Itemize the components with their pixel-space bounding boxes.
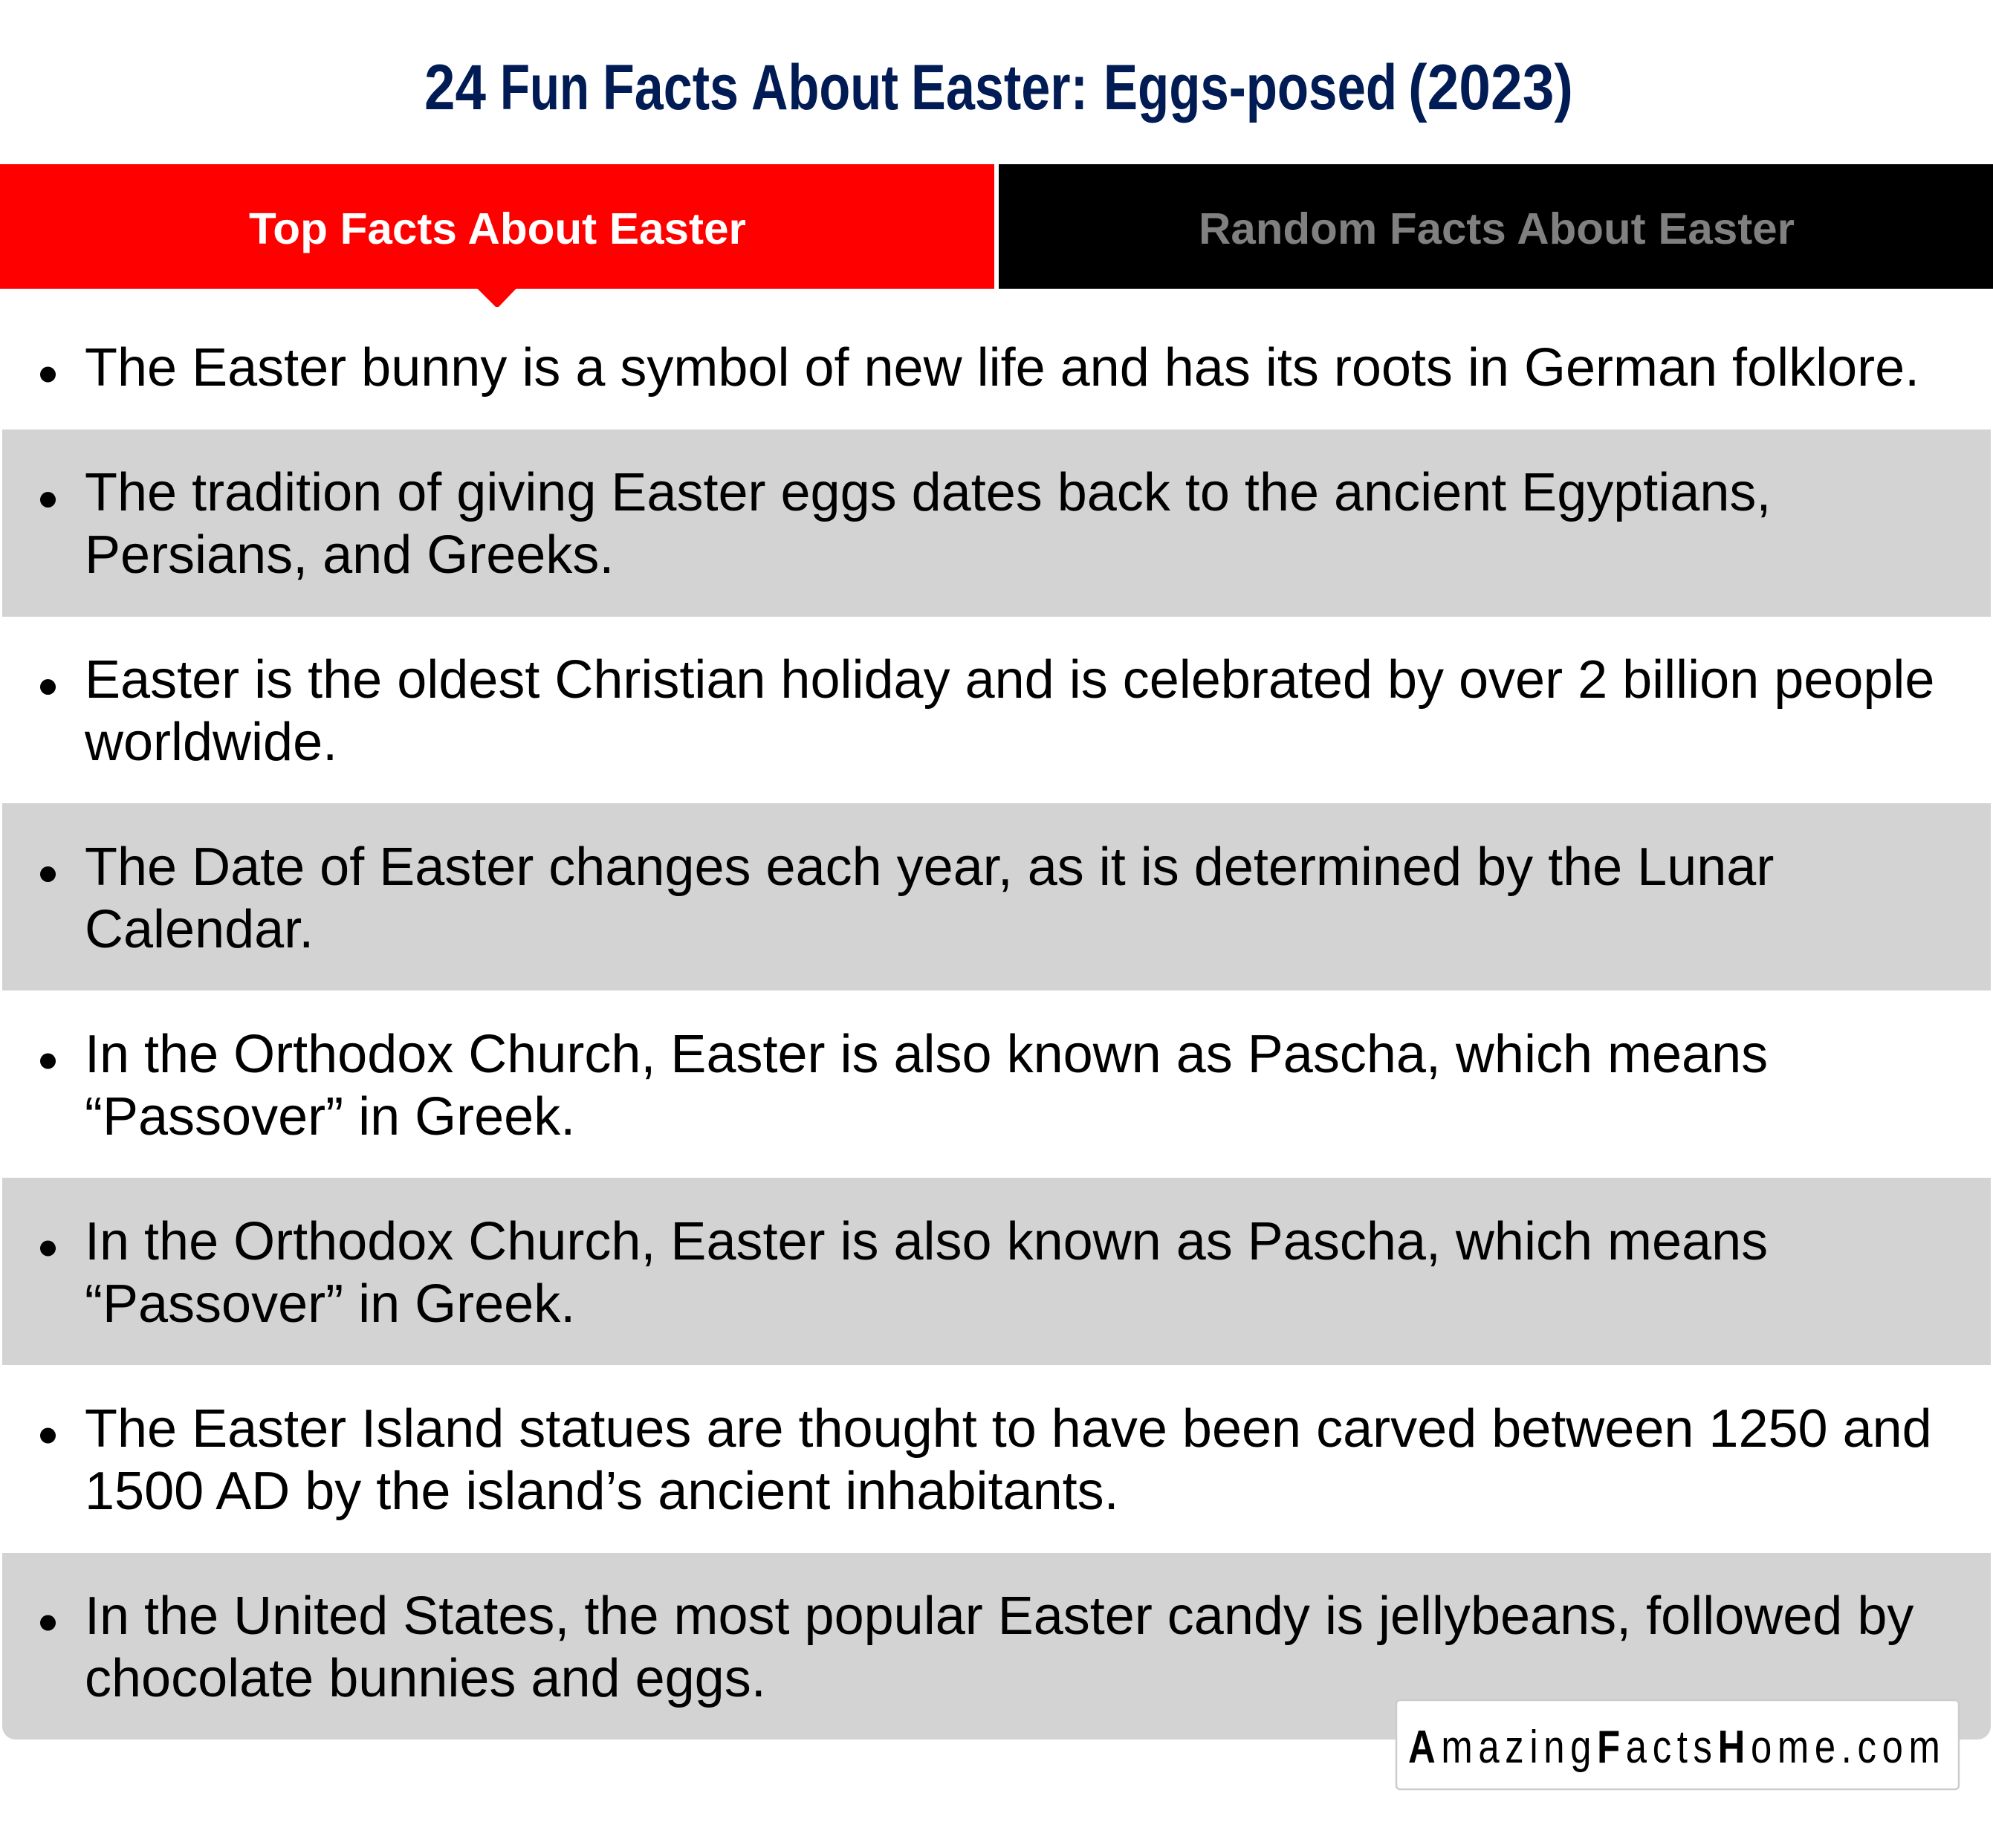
watermark: AmazingFactsHome.com: AmazingFactsHome.com <box>1408 1722 1940 1773</box>
tab: random facts (inactive): Random Facts About Easter <box>1199 204 1795 253</box>
title: Facts <box>603 52 739 123</box>
tab: top facts (active) <box>0 164 994 307</box>
fact row 2: Persians, and Greeks. <box>85 525 614 585</box>
fact row 8: In the United States, the most popular Easter candy is jellybeans, followed by <box>85 1586 1913 1646</box>
fact row 8 <box>2 1553 1991 1740</box>
fact row 6: “Passover” in Greek. <box>85 1274 575 1334</box>
fact row 4: Calendar. <box>85 900 314 959</box>
fact row 8: chocolate bunnies and eggs. <box>85 1649 766 1708</box>
fact row 7: 1500 AD by the island’s ancient inhabitants. <box>85 1462 1119 1521</box>
fact row 3: Easter is the oldest Christian holiday and is celebrated by over 2 billion people <box>85 650 1934 710</box>
fact row 4 <box>2 803 1991 991</box>
fact row 6 <box>2 1178 1991 1365</box>
fact row 1: The Easter bunny is a symbol of new life and has its roots in German folklore. <box>85 338 1919 398</box>
fact row 5 <box>40 1025 1768 1147</box>
fact row 7 <box>40 1399 1932 1521</box>
title: (2023) <box>1408 52 1573 123</box>
fact row 6: In the Orthodox Church, Easter is also known as Pascha, which means <box>85 1212 1768 1271</box>
watermark: AmazingFactsHome.com <box>1396 1700 1959 1789</box>
tab: random facts (inactive) <box>999 164 1993 289</box>
title: 24 <box>424 52 486 123</box>
fact row 4: The Date of Easter changes each year, as it is determined by the Lunar <box>85 837 1774 897</box>
title: Eggs-posed <box>1104 52 1397 123</box>
title: About <box>751 52 898 123</box>
fact row 2: The tradition of giving Easter eggs dates back to the ancient Egyptians, <box>85 463 1771 522</box>
fact row 7: The Easter Island statues are thought to have been carved between 1250 and <box>85 1399 1932 1459</box>
fact row 5: In the Orthodox Church, Easter is also known as Pascha, which means <box>85 1025 1768 1084</box>
tab: top facts (active): Top Facts About Easter <box>249 204 746 253</box>
fact row 2 <box>2 429 1991 617</box>
fact row 3 <box>40 650 1934 772</box>
fact row 5: “Passover” in Greek. <box>85 1087 575 1147</box>
title: Easter: <box>911 52 1088 123</box>
fact row 3: worldwide. <box>84 713 337 772</box>
title: Fun <box>500 52 589 123</box>
title <box>424 52 1573 123</box>
